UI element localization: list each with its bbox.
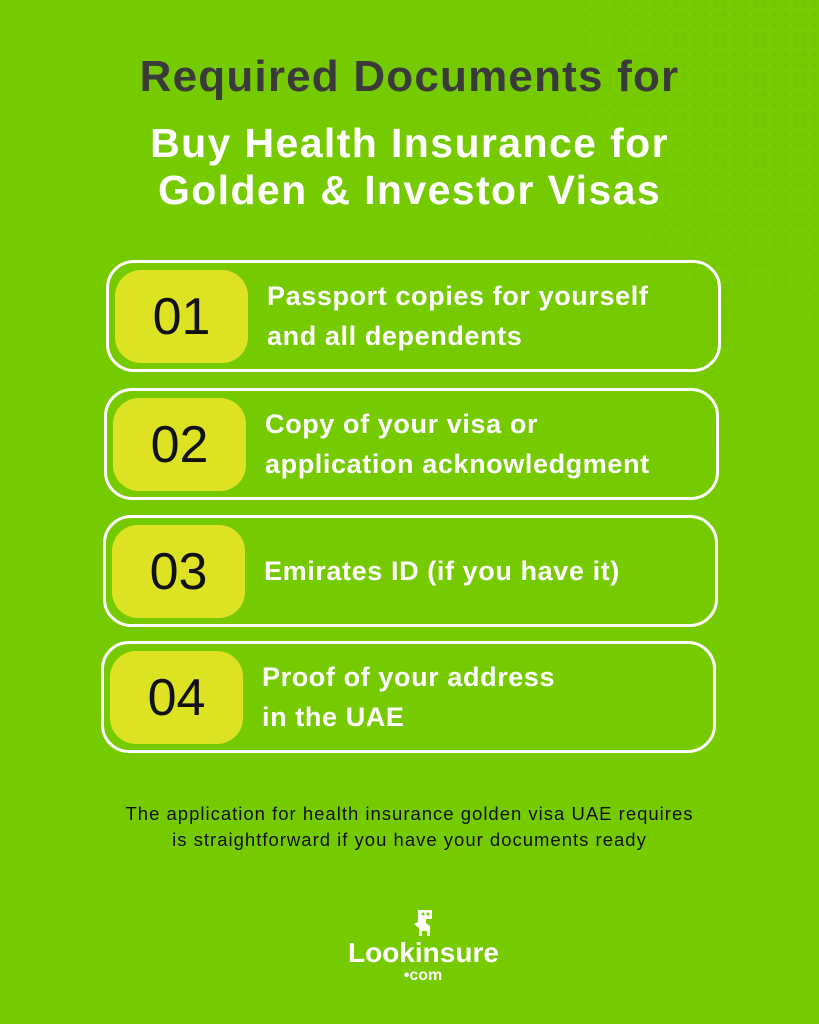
card 02 bbox=[104, 388, 719, 500]
subtitle: Buy Health Insurance for bbox=[150, 120, 669, 166]
card 04: 04 bbox=[148, 668, 205, 726]
card 03: Emirates ID (if you have it) bbox=[264, 556, 620, 586]
logo: •com bbox=[404, 967, 442, 984]
card 04 bbox=[101, 641, 716, 753]
decorative dots bbox=[724, 4, 816, 116]
card 03 bbox=[103, 515, 718, 627]
card 01: 01 bbox=[153, 288, 210, 346]
footnote bbox=[126, 803, 694, 850]
subtitle bbox=[150, 120, 669, 213]
logo: Lookinsure bbox=[348, 937, 499, 968]
footnote: is straightforward if you have your documents ready bbox=[172, 829, 647, 850]
footnote: The application for health insurance golden visa UAE requires bbox=[126, 803, 694, 824]
card 02: Copy of your visa or bbox=[265, 409, 538, 439]
card 02: application acknowledgment bbox=[265, 449, 650, 479]
card 04: Proof of your address bbox=[262, 662, 555, 692]
card 01: and all dependents bbox=[267, 321, 522, 351]
card 02: 02 bbox=[151, 416, 208, 474]
title: Required Documents for bbox=[140, 52, 679, 101]
card 03: 03 bbox=[150, 542, 207, 600]
icon: mascot bbox=[414, 910, 432, 936]
card 01: Passport copies for yourself bbox=[267, 281, 648, 311]
card 04: in the UAE bbox=[262, 702, 405, 732]
subtitle: Golden & Investor Visas bbox=[158, 167, 661, 213]
logo bbox=[348, 910, 499, 984]
card 01 bbox=[106, 260, 721, 372]
